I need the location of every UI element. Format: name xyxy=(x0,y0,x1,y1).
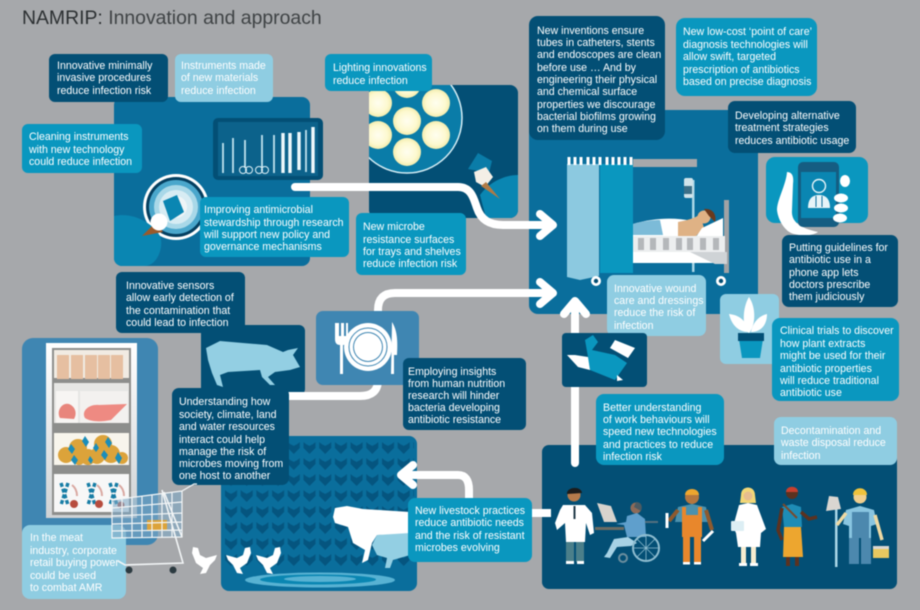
label: clinical trials: antibiotic use xyxy=(780,387,842,399)
label: society: Understanding how xyxy=(179,396,271,408)
label: society: manage the risk of xyxy=(179,446,266,458)
label: phone app xyxy=(782,235,898,307)
label: phone app: phone app lets xyxy=(789,267,859,279)
label: meat industry xyxy=(22,525,126,599)
label: cleaning instruments xyxy=(22,124,142,173)
label: surfaces: New microbe xyxy=(363,221,425,233)
label: sensors xyxy=(116,272,245,333)
label: stewardship: stewardship through research xyxy=(204,217,344,229)
arrow: livestock practice to chickens xyxy=(401,465,469,500)
label: clinical trials: antibiotic properties xyxy=(780,363,872,375)
instrument tray xyxy=(213,118,323,180)
label: stewardship: will support new policy and xyxy=(203,229,330,241)
label: livestock practices: reduce antibiotic needs xyxy=(415,517,524,529)
label: alternative treatment: Developing alternative xyxy=(735,110,840,122)
person: wheelchair user xyxy=(595,502,659,562)
icon: patient in bed xyxy=(633,178,729,273)
icon: bandaged limb xyxy=(567,335,635,381)
label: surfaces: reduce infection risk xyxy=(363,258,458,270)
label: new inventions: tubes in catheters, stents xyxy=(537,37,655,49)
label: surfaces: for trays and shelves xyxy=(363,246,461,258)
label: new inventions: and endoscopes are clean xyxy=(537,49,661,61)
label: work behaviours: Better understanding xyxy=(603,402,701,414)
label: new inventions: bacterial biofilms growing xyxy=(537,111,656,123)
person: engineer in orange overalls xyxy=(667,489,713,564)
label: new materials: Instruments made xyxy=(181,60,266,72)
icon: calf xyxy=(372,532,410,568)
label: work behaviours: of work behaviours will xyxy=(603,414,710,426)
label: decontamination xyxy=(774,417,897,465)
icon: plate and cutlery xyxy=(335,322,397,374)
label: cleaning instruments: could reduce infection xyxy=(29,156,132,168)
label: meat industry: to combat AMR xyxy=(30,582,103,594)
icon: operating light xyxy=(368,84,464,174)
label: new inventions: properties we discourage xyxy=(537,99,655,111)
label: clinical trials: might be used for their xyxy=(780,350,886,362)
icon: potted plant xyxy=(729,297,767,358)
label: society: and water resources xyxy=(179,421,275,433)
label: point of care: based on precise diagnosis xyxy=(683,76,811,88)
label: clinical trials: will reduce traditional xyxy=(779,375,879,387)
icon: cow xyxy=(333,506,410,563)
label: nutrition xyxy=(403,358,526,430)
panel: plant extract xyxy=(720,294,779,364)
person: woman farm worker xyxy=(778,487,817,566)
title: NAMRIP: Innovation and approach xyxy=(22,7,322,29)
label: society: microbes moving from xyxy=(179,458,283,470)
panel: phone app xyxy=(766,157,868,235)
label: sensors: the contamination that xyxy=(126,305,230,317)
label: minimally invasive: Innovative minimally xyxy=(57,60,153,72)
icon: chicken xyxy=(226,547,251,574)
label: work behaviours: infection risk xyxy=(603,451,663,463)
label: sensors: Innovative sensors xyxy=(126,280,214,292)
label: point of care: prescription of antibiotics xyxy=(683,64,800,76)
arrow: food to ward xyxy=(289,282,553,396)
label: work behaviours: speed new technologies xyxy=(603,426,717,438)
icon: hand holding phone xyxy=(777,162,850,235)
label: nutrition: antibiotic resistance xyxy=(408,414,501,426)
icon: surgeon xyxy=(468,153,518,218)
connector: livestock to workforce xyxy=(530,509,551,517)
label: phone app: doctors prescribe xyxy=(789,279,870,291)
panel: food and pig xyxy=(201,325,305,395)
panel: bandage xyxy=(562,333,647,387)
label: lighting: Lighting innovations xyxy=(333,62,427,74)
panel: hospital ward xyxy=(529,110,758,314)
label: meat industry: retail buying power xyxy=(30,557,119,569)
label: surfaces: resistance surfaces xyxy=(363,234,454,246)
label: wound care: infection xyxy=(614,320,654,332)
icon: water puddle xyxy=(245,572,395,588)
label: point of care: New low-cost ‘point of care’ xyxy=(683,26,812,38)
label: meat industry: In the meat xyxy=(30,532,83,544)
label: clinical trials xyxy=(772,318,899,401)
icon: chicken xyxy=(256,547,281,574)
label: work behaviours: and practices to reduce xyxy=(603,439,713,451)
panel: livestock xyxy=(221,436,417,591)
label: cleaning instruments: with new technology xyxy=(28,144,125,156)
label: nutrition: bacteria developing xyxy=(408,402,500,414)
label: decontamination: infection xyxy=(781,450,821,462)
label: new inventions xyxy=(529,16,665,140)
label: point of care: allow swift, targeted xyxy=(683,51,776,63)
label: sensors: could lead to infection xyxy=(126,317,229,329)
label: wound care: reduce the risk of xyxy=(614,307,695,319)
label: work behaviours xyxy=(596,394,724,465)
label: phone app: Putting guidelines for xyxy=(789,242,888,254)
arrow: instruments and lighting to ward xyxy=(295,187,553,236)
label: point of care: diagnosis technologies will xyxy=(683,39,808,51)
label: livestock practices: microbes evolving xyxy=(415,542,500,554)
label: lighting: reduce infection xyxy=(333,75,408,87)
panel: cold-store fridge xyxy=(22,338,158,545)
label: alternative treatment: treatment strategies xyxy=(735,122,829,134)
panel: instruments and stewardship xyxy=(114,97,323,266)
label: minimally invasive: invasive procedures xyxy=(57,72,151,84)
label: new materials: reduce infection xyxy=(181,85,256,97)
label: livestock practices: New livestock practices xyxy=(415,505,525,517)
panel: place setting xyxy=(316,311,419,385)
label: wound care: care and dressings xyxy=(614,295,704,307)
label: society: interact could help xyxy=(179,434,265,446)
label: new inventions: before use … And by xyxy=(537,62,637,74)
label: nutrition: research will hinder xyxy=(408,390,500,402)
label: lighting xyxy=(325,54,432,91)
label: point of care xyxy=(676,18,817,96)
label: stewardship xyxy=(200,197,349,257)
panel: workforce xyxy=(542,445,897,589)
label: nutrition: Employing insights xyxy=(408,366,496,378)
label: alternative treatment: reduces antibiotic usage xyxy=(735,135,849,147)
arrow: workforce to ward xyxy=(564,301,586,463)
person: doctor xyxy=(555,488,594,564)
label: wound care: Innovative wound xyxy=(614,283,697,295)
label: alternative treatment xyxy=(728,101,856,153)
person: female doctor xyxy=(731,488,766,566)
panel: lighting xyxy=(368,84,519,219)
label: livestock practices xyxy=(408,498,532,562)
icon: curtain xyxy=(567,157,726,286)
icon: fridge shelves xyxy=(46,343,137,518)
label: minimally invasive xyxy=(49,54,168,102)
label: cleaning instruments: Cleaning instruments xyxy=(29,131,129,143)
label: new materials: of new materials xyxy=(181,72,258,84)
person: cleaner with mop and bucket xyxy=(826,488,889,567)
label: new inventions: New inventions ensure xyxy=(537,25,644,37)
label: clinical trials: how plant extracts xyxy=(780,338,865,350)
label: stewardship: Improving antimicrobial xyxy=(204,204,313,216)
label: phone app: antibiotic use in a xyxy=(789,254,871,266)
label: phone app: them judiciously xyxy=(789,291,865,303)
label: livestock practices: and the risk of resistant xyxy=(415,530,525,542)
label: new materials xyxy=(175,54,273,102)
label: clinical trials: Clinical trials to discover xyxy=(780,325,894,337)
label: surfaces xyxy=(356,213,466,275)
label: minimally invasive: reduce infection risk xyxy=(57,85,152,97)
label: meat industry: could be used xyxy=(30,570,96,582)
label: new inventions: engineering their physical xyxy=(537,74,657,86)
label: new inventions: on them during use xyxy=(537,123,628,135)
label: stewardship: governance mechanisms xyxy=(204,241,322,253)
label: new inventions: and chemical surface xyxy=(537,86,637,98)
icon: pig xyxy=(206,341,300,387)
label: society xyxy=(172,388,289,485)
icon: shopping cart xyxy=(112,484,197,574)
icon: chicken xyxy=(192,547,217,574)
label: society: one host to another xyxy=(179,470,271,482)
label: decontamination: waste disposal reduce xyxy=(780,437,886,449)
icon: surgeon at operating lamp xyxy=(114,174,209,266)
label: society: society, climate, land xyxy=(179,409,277,421)
label: nutrition: from human nutrition xyxy=(408,378,505,390)
label: decontamination: Decontamination and xyxy=(781,425,881,437)
label: sensors: allow early detection of xyxy=(126,292,234,304)
label: meat industry: industry, corporate xyxy=(30,545,117,557)
label: wound care xyxy=(607,275,706,336)
